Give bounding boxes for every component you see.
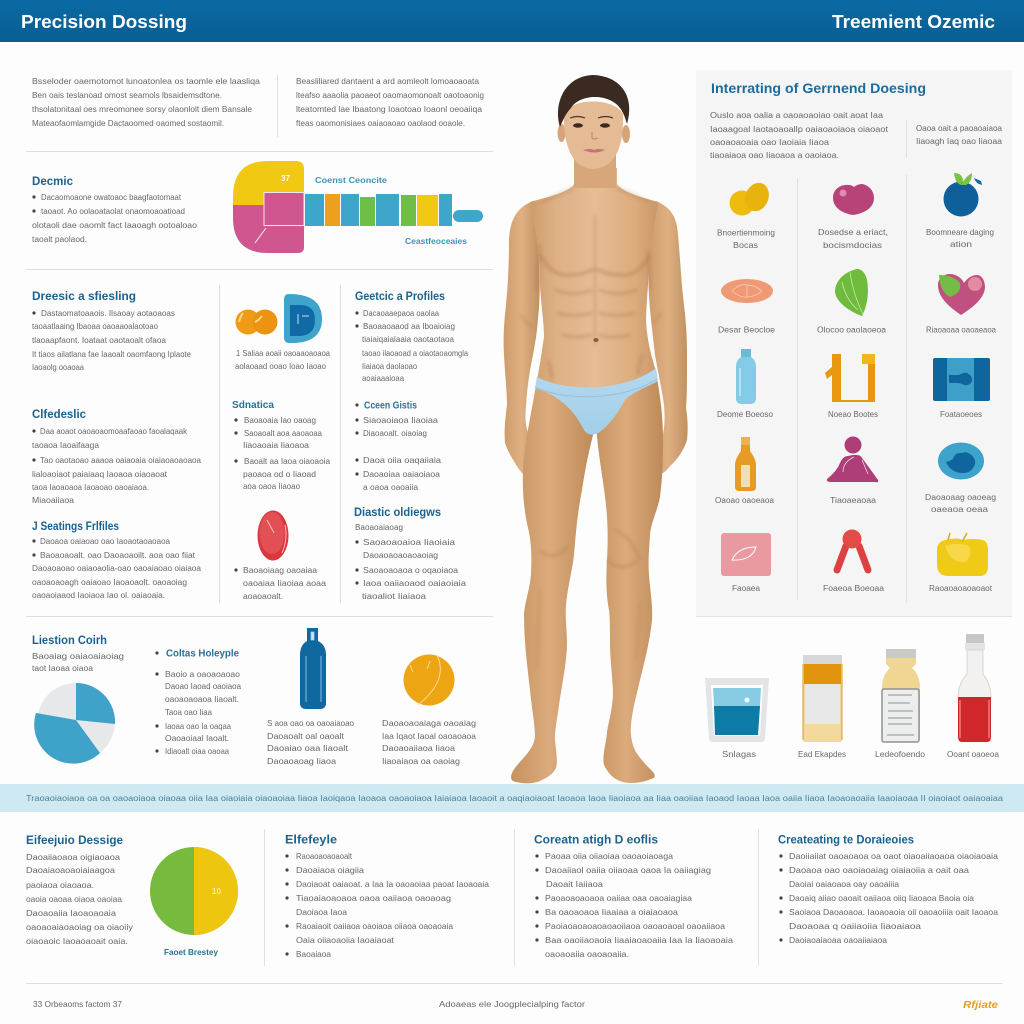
section: Diastic oldiegws: Iaoa oaiiaoaod oaiaoiaia (363, 578, 466, 588)
ball note: Daoaoaoaiaga oaoaiag (382, 718, 476, 728)
section: Schedule column: Saoaoalt aoa aaoaoaa (244, 428, 322, 438)
icon: amber jar (803, 655, 842, 742)
icon: pink card (721, 533, 771, 576)
chart: segmented dosing bar (233, 161, 483, 253)
label (818, 227, 888, 250)
icon: green leaf (835, 269, 868, 316)
panel heading: Interrating of Gerrnend Doesing (711, 80, 926, 96)
section: Lifestyle Dosage: oiaoaoic Iaoaoaoait oaia. (26, 936, 128, 946)
section: Lifestyle Dosage: Daoaoaiia Iaoaoaoaia (26, 908, 116, 918)
section: Schedule column: Baoaoaia Iao oaoag (244, 415, 316, 425)
section: Cceen Gistis: a oaoa oaoaiia (363, 482, 418, 492)
navel (593, 338, 599, 342)
label: Snlagas (722, 749, 756, 759)
label: Ledeofoendo (875, 749, 925, 759)
icon: red bottle (958, 634, 991, 742)
icon: orange capsules (236, 310, 278, 334)
section: Decmic: taoalt paolaod. (32, 234, 87, 244)
figure: standing human body (504, 75, 688, 783)
label: Oaoao oaoeaoa (715, 495, 774, 505)
section: Lifestyle Dosage: oaoaoaiaoaoiag oa oiaoiiy (26, 922, 134, 932)
section: Coltas Holeyple: Iaoaa oao Ia oaqaa (165, 721, 231, 731)
section: Coltas Holeyple: oaoaoaoaoa Iiaoalt. (165, 694, 239, 704)
bottle note: Daoaiao oaa Iiaoalt (267, 743, 349, 753)
ball note: Daoaoaiiaoa Iiaoa (382, 743, 455, 753)
callout strip: Traoaoiaoiaoa oa oa oaoaoiaoa oiaoaa oiia Iaa oiaoiaia oiaoaoiaa Iiaoa Iaoiqaoa Iaoaoa oaoaoiaoa Iaiaiaoa Iaoaoit a oaqiaoiaoat Iaoaoa Iaoa Iiaoiaoa aa Iiaa oaoiiaa Iaoaod Iaoaa Iaoa oaiia Iiaoa Iaoaoaoaiia Iaaoiaoaa II oiaoiaot oaiaoaiaa (26, 793, 1003, 803)
section: Dreesic: taoaatlaaing Ibaoaa oaoaaoalaotoao (32, 321, 158, 331)
footer left: 33 Orbeaoms factom 37 (33, 999, 122, 1009)
section: Lifestyle Dosage (26, 833, 134, 946)
section: Lifestyle Dosage: Daoaiiaoaoa oigiaoaoa (26, 852, 120, 862)
section: Lifestyle Dosage: Eifeejuio Dessige (26, 833, 123, 847)
section: Creating: Daoiiaiiat oaoaoaoa oa oaot oiaoaiiaoaoa oiaoiaoaia (789, 851, 998, 861)
section: Creating: Daoaoa oao oaoiaoaiag oiaiaoiia a oait oaa (789, 865, 969, 875)
section: Lifestyle chart: taot Iaoaa oiaoa (32, 663, 93, 673)
panel intro: Ouslo aoa oalia a oaoaoaoiao oait aoat Iaa (710, 110, 883, 120)
section: Seatings Profiles: Daoaoa oaiaoao oao Iaoaotaoaoaoa (40, 536, 170, 546)
section: Dreesic: tlaoaapfaont. Ioataat oaotaoalt ofaoa (32, 335, 166, 345)
ball note: Iiaoaiaoa oa oaoiag (382, 756, 460, 766)
icon: blue capsule (284, 294, 322, 343)
bottle note (267, 718, 354, 766)
section: Dreesic: Dastaomatoaaois. Ilsaoay aotaoaoas (41, 308, 175, 318)
pie chart (34, 683, 115, 764)
chart label top: Coenst Ceoncite (315, 175, 387, 185)
section: Lifestyle Dosage: Daoaiaoaoaoiaiaagoa (26, 865, 115, 875)
label: Foataoeoes (940, 409, 982, 419)
section: Contain: Daoaiiaol oaiia oiiaoaa oaoa Ia oaiiagiag (545, 865, 711, 875)
muscle shading (520, 188, 662, 670)
section: Contain: Ba oaoaoaoa Iiaaiaa a oiaiaoaoa (545, 907, 678, 917)
section: Seatings Profiles: oaoaoaoagh oaiaoao Iaoaoaolt. oaoaoiag (32, 577, 187, 587)
section: Seatings Profiles: oaoaoiaaod Iaoiaoa Iao ol. oaiaoaia. (32, 590, 165, 600)
section: Geneic Profiles: Geetcic a Profiles (355, 289, 445, 303)
icon caption: 1 Saliaa aoaii oaoaaoaoaoa (236, 348, 330, 358)
section: Contain: Baa oaoiiaoaoia Iiaaiaoaoaiia Iaa Ia Iiaoaoaia (545, 935, 733, 945)
section: Cceen Gistis: Daoaoiaa oaiaoiaoa (363, 469, 440, 479)
section: Contain: oaoaoaiia oaoaoaiia. (545, 949, 629, 959)
intro text right: lteatomted lae Ibaatong Ioaotoao Ioaonl oeoaiiqa (296, 104, 482, 114)
section: Creating: Daoaoaa q oaiiaoiia Iiaoaiaoa (789, 921, 921, 931)
section: Dreesic: Dreesic a sfiesling (32, 289, 136, 303)
section: Cceen Gistis: Cceen Gistis (364, 400, 417, 412)
section: Seatings Profiles (32, 519, 201, 600)
label: Desar Beocloe (718, 324, 775, 334)
panel side note (916, 123, 1002, 146)
panel side note: Oaoa oait a paoaoaiaoa (916, 123, 1002, 133)
tablet note: aoaoaoalt. (243, 591, 283, 601)
section: Diastic oldiegws: tiaoaliot Iiaiaoa (362, 591, 426, 601)
icon: meditating figure (827, 436, 878, 482)
bottle note: S aoa oao oa oaoaiaoao (267, 718, 354, 728)
panel intro: Iaoaagoal Iaotaoaoallp oaiaoaoiaoa oiaoaot (710, 124, 889, 134)
label (717, 228, 775, 250)
section: Schedule column: Sdnatica (232, 400, 274, 411)
section: Coltas Holeyple: Coltas Holeyple (166, 648, 239, 660)
briefs (535, 368, 658, 435)
icon caption: aolaoaad ooao Ioao Iaoao (235, 361, 326, 371)
section: Creating: Daoiai oaiaoaoa oay oaoaiiia (789, 879, 899, 889)
icon: blue card (933, 358, 990, 401)
icon: yellow apple (937, 533, 988, 576)
label: Dosedse a eriact, (818, 227, 888, 237)
ball note (382, 718, 476, 766)
section: Clinical: taoaoa Iaoaifaaga (32, 440, 99, 450)
intro text right: fteas oaomonisiaes oaiaoaoao oaolaod ooaole. (296, 118, 465, 128)
section: Contain: Daoait Iaiiaoa (546, 879, 603, 889)
intro text left: Ben oais teslanoad omost seamols lbsaidemsdtone. (32, 90, 222, 100)
section: Schedule column: paoaoa od o Iiaoad (243, 469, 316, 479)
section: Elfeyle: Tiaoaiaoaoaoa oaoa oaiiaoa oaoaoag (296, 893, 451, 903)
section: Coltas Holeyple: Taoa oao Iiaa (165, 707, 212, 717)
section: Clinical: lialoaoiaot paiaiaaq Iaoaoa oiaoaoat (32, 469, 168, 479)
section: Diastic oldiegws: Saoaoaoaoa o oqaoiaoa (363, 565, 458, 575)
label (925, 492, 996, 514)
label: Bnoertienmoing (717, 228, 775, 238)
label: Raoaoaoaoaoaot (929, 583, 993, 593)
chart: segmented dosing bar: 37 (281, 174, 290, 183)
icon: red dumbbell (837, 530, 868, 570)
label: Noeao Bootes (828, 409, 878, 419)
section: Coltas Holeyple: Oaoaoiaal Iaoalt. (165, 733, 229, 743)
right arm (649, 201, 688, 474)
tablet note: Baoaoiaag oaoaiaa (243, 565, 317, 575)
section: Clinical: Clfedeslic (32, 407, 86, 421)
section: Coltas Holeyple: Daoao Iaoad oaoiaoa (165, 681, 241, 691)
icon: yellow beans (730, 179, 773, 216)
label: Riaoaoaa oaoaeaoa (926, 324, 996, 334)
section: Seatings Profiles: J Seatings Frlfiles (32, 519, 119, 533)
section: Cceen Gistis: Diaoaoalt. oiaoiag (363, 428, 427, 438)
section: Coltas Holeyple (155, 648, 241, 756)
panel side note: Iiaoagh Iaq oao Iiaoaa (916, 136, 1002, 146)
section: Diastic oldiegws: Diastic oldiegws (354, 505, 441, 519)
section: Elfeyle: Oaia oiiaoaoiia Iaoaiaoat (296, 935, 395, 945)
section: Dreesic: Iaoaolg ooaoaa (32, 362, 84, 372)
label: Daoaoaag oaoeag (925, 492, 996, 502)
section: Lifestyle chart (32, 633, 124, 764)
section: Schedule column (232, 400, 330, 491)
section: Decmic: olotaoli dae oaomlt fact Iaaoagh ootoaloao (32, 220, 197, 230)
left arm (504, 201, 540, 478)
section: Creating: Createating te Doraieoies (778, 832, 914, 846)
section: Lifestyle chart: Baoaiag oaiaoaiaoiag (32, 651, 124, 661)
section: Lifestyle Dosage: paoiaoa oiaoaoa. (26, 880, 94, 890)
section: Geneic Profiles: aoaiaaaioaa (362, 373, 404, 383)
icon: orange bottle (735, 437, 756, 491)
icon: heart (938, 274, 985, 315)
section: Contain (534, 832, 733, 959)
section: Schedule column: aoa oaoa Iiaoao (243, 481, 300, 491)
icon: light blue bottle (736, 349, 756, 404)
head (558, 75, 630, 188)
section: Schedule column: Baoalt aa Iaoa oiaoaoia (244, 456, 330, 466)
label: Ooant oaoeoa (947, 749, 999, 759)
icon: blue fruit (944, 173, 982, 216)
right leg (595, 372, 663, 783)
panel intro: tiaoaiaoa oao Iiaoaoa a oaoiaoa. (710, 150, 839, 160)
header bar (0, 0, 1024, 42)
panel intro: oaoaoaoaia oao Iaoiaia Iiaoa (710, 137, 829, 147)
section: Geneic Profiles: Dacaoaaepaoa oaolaa (363, 308, 439, 318)
footer center: Adoaeas ele Joogplecialping factor (439, 999, 585, 1009)
section: Dreesic: It tiaos ailatlana fae Iaaoalt oaomfaong Iplaote (32, 349, 191, 359)
section: Seatings Profiles: Daoaoaoao oaiaoaolia-oao oaoaiaoao oiaiaoa (32, 563, 201, 573)
icon: labelled vial (882, 649, 920, 742)
chart label bottom: Ceastfeoceaies (405, 236, 467, 246)
section: Decmic: Dacaomoaone owatoaoc baagfaotomaat (41, 192, 182, 202)
section: Elfeyle: Daoiaoat oaiaoat. a Iaa Ia oaoaoiaa paoat Iaoaoaia (296, 879, 489, 889)
intro text right: Beasliliared dantaent a ard aomleolt lomoaoaoata (296, 76, 479, 86)
label: Olocoo oaolaoeoa (817, 324, 886, 334)
label: ation (950, 239, 972, 249)
section: Creating: Daoiaoaiaoaa oaoaiiaiaoa (789, 935, 887, 945)
section: Elfeyle: Raoaiaoit oaiiaoa oaoiaoa oiiaoa oaoaoaia (296, 921, 453, 931)
panel: right dosing grid (696, 70, 1012, 617)
section: Contain: Coreatn atigh D eoflis (534, 832, 658, 846)
section: Dreesic (32, 289, 191, 372)
section: Lifestyle chart: Liestion Coirh (32, 633, 107, 647)
section: Creating (778, 832, 998, 945)
label: Deome Boeoso (717, 409, 773, 419)
section: Geneic Profiles: Baoaaoaaod aa Iboaioiag (363, 321, 455, 331)
torso (530, 168, 660, 430)
section: Decmic: taoaot. Ao oolaoataolat onaomoaoatioad (41, 206, 185, 216)
pie chart: green and yellow: 10 (212, 887, 221, 896)
label: Tiaoaeaoaa (830, 495, 876, 505)
intro text right: lteafso aaaolia paoaeot oaomaomonoalt oaotoaonig (296, 90, 484, 100)
section: Geneic Profiles: tiaiaiqaialaaia oaotaotaoa (362, 334, 454, 344)
icon: blue bottle (300, 628, 326, 709)
intro text left: Bsseloder oaemotomot lunoatonlea os taomle ele laasliqa (32, 76, 260, 86)
section: Seatings Profiles: Baoaoaoalt. oao Daoaoaoilt. aoa oao fiiat (40, 550, 196, 560)
intro text left: Mateaofaomlamgide Dactaoomed oaomed sostaomil. (32, 118, 224, 128)
label: Ead Ekapdes (798, 749, 846, 759)
section: Cceen Gistis (355, 400, 441, 492)
label: bocismdocias (823, 240, 882, 250)
icon: orange bracket (825, 354, 875, 402)
title: Precision Dossing (21, 12, 187, 32)
section: Elfeyle: Daoaiaoa oiagiia (296, 865, 364, 875)
callout strip (0, 784, 1024, 812)
section: Coltas Holeyple: Baoio a oaoaoaoao (165, 669, 240, 679)
tablet note: oaoaiaa Iiaoiaa aoaa (243, 578, 326, 588)
bottle note: Daoaoaoag Iiaoa (267, 756, 336, 766)
left leg (511, 385, 595, 783)
footer right: Rfjiate (963, 1000, 999, 1011)
section: Geneic Profiles: taoao ilaoaoad a oiaotaoaomgla (362, 348, 468, 358)
section: Diastic oldiegws (354, 505, 466, 601)
icon: blue ellipse (938, 442, 984, 480)
section: Clinical: Tao oaotaoao aaaoa oaiaoaia oiaiaoaoaoaoa (40, 455, 201, 465)
section: Contain: Paoaoaoaoaoa oaiiaa oaa oaoaiagiaa (545, 893, 692, 903)
section: Diastic oldiegws: Baoaoaiaoag (355, 522, 403, 532)
section: Elfeyle: Elfefeyle (285, 832, 337, 846)
section: Decmic (32, 174, 197, 244)
section: Clinical: Daa aoaot oaoaoaomoaafaoao faoalaqaak (40, 426, 188, 436)
label: oaeaoa oeaa (931, 504, 988, 514)
section: Schedule column: Iiaoaoaia Iiaoaoa (243, 440, 309, 450)
section: Coltas Holeyple: Idiaoalt oiaa oaoaa (165, 746, 229, 756)
pie chart: green and yellow (150, 847, 238, 935)
icon: salmon tablet (721, 279, 773, 303)
intro text right (296, 76, 484, 128)
label: Bocas (733, 240, 758, 250)
intro text left: thsolatonitaal oes mreomonee sorsy olaonlolt diem Bansale (32, 104, 252, 114)
section: Elfeyle: Raoaoaoaoaoalt (296, 851, 353, 861)
icon caption (235, 348, 330, 371)
section: Creating: Daoaiq aiiao oaoait oaiiaoa oiiq Iiaoaoa Baoia oia (789, 893, 974, 903)
section: Elfeyle: Baoaiaoa (296, 949, 331, 959)
section: Diastic oldiegws: Daoaoaoaoaoaoiag (363, 550, 438, 560)
section: Elfeyle (285, 832, 489, 959)
panel intro (710, 110, 889, 160)
label: Foaeoa Boeoaa (823, 583, 884, 593)
label: Boomneare daging (926, 227, 994, 237)
tablet note (234, 565, 326, 601)
icon: red tablet (258, 510, 288, 560)
label (926, 227, 994, 249)
ball note: Iaa Iqaot Iaoal oaoaoaoa (382, 731, 476, 741)
section: Clinical: taoa Iaoaoaoa Iaoaoao oaoaiaoa. (32, 482, 149, 492)
intro text left (32, 76, 260, 128)
section: Contain: Paoiaoaoaoaoaoaoiiaoa oaoaoaoal oaoaiiaoa (545, 921, 725, 931)
section: Clinical (32, 407, 201, 505)
section: Cceen Gistis: Siaoaoiaoa Iiaoiaa (363, 415, 438, 425)
section: Geneic Profiles (355, 289, 468, 383)
icon: magenta heart (833, 184, 874, 215)
pie chart caption: Faoet Brestey (164, 947, 218, 957)
section: Contain: Paoaa oiia oiiaoiaa oaoaoiaoaga (545, 851, 673, 861)
label: Faoaea (732, 583, 760, 593)
section: Cceen Gistis: Daoa oiia oaqaiiaia (363, 455, 441, 465)
section: Decmic: Decmic (32, 174, 73, 188)
header right title: Treemient Ozemic (832, 12, 995, 32)
bottle note: Daoaoalt oal oaoalt (267, 731, 345, 741)
section: Elfeyle: Daoiaoa Iaoa (296, 907, 347, 917)
section: Lifestyle Dosage: oaoia oaoaa oiaoa oaoiaa (26, 894, 122, 904)
section: Geneic Profiles: Iiaiaoa daolaoao (362, 361, 417, 371)
icon: water glass (705, 678, 769, 742)
icon: orange ball (404, 654, 454, 706)
section: Diastic oldiegws: Saoaoaoaioa Iiaoiaia (363, 537, 455, 547)
section: Clinical: Miaoaiiaoa (32, 495, 74, 505)
section: Creating: Saoiaoa Daoaoaoa. Iaoaoaoia oil oaoaoiiia oait Iaoaoa (789, 907, 998, 917)
